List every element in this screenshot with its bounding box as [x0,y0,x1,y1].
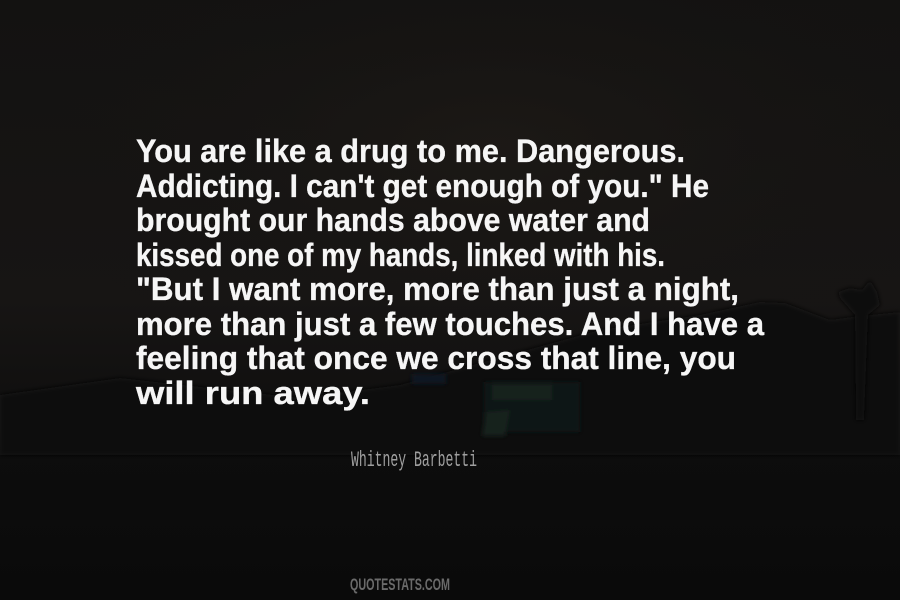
parked car [412,374,580,436]
quote text: Addicting. I can't get enough of you." He [136,168,709,204]
quote text: more than just a few touches. And I have a [136,306,764,342]
mountain and tree silhouettes [0,280,900,455]
quote text: kissed one of my hands, linked with his. [136,237,665,273]
quote text: "But I want more, more than just a night, [136,271,739,307]
quote text: feeling that once we cross that line, you [136,340,736,376]
quote text: You are like a drug to me. Dangerous. [136,133,685,169]
quote text: will run away. [135,375,370,411]
author name: Whitney Barbetti [351,448,477,473]
site watermark: QUOTESTATS.COM [350,575,450,594]
quote text [135,133,764,411]
quote text: brought our hands above water and [136,202,650,238]
